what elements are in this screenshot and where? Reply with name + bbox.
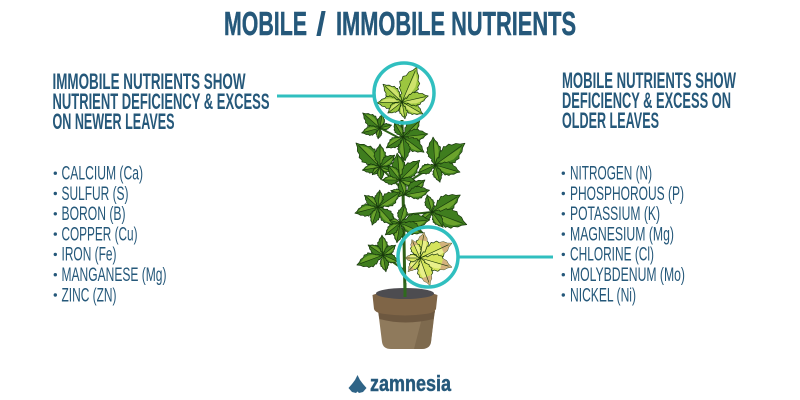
wordmark: zamnesia — [370, 371, 452, 396]
leaf: upper middle — [383, 115, 429, 161]
list: immobile nutrients: IRON (Fe) — [62, 244, 116, 266]
list: immobile nutrients: COPPER (Cu) — [62, 223, 138, 245]
leaf: old yellowing, bottom — [405, 231, 456, 288]
leaf: bottom left — [354, 235, 400, 273]
list: mobile nutrients: POTASSIUM (K) — [570, 203, 660, 225]
list: immobile nutrients: BORON (B) — [62, 203, 126, 225]
list: mobile nutrients: NICKEL (Ni) — [570, 284, 636, 306]
title: / — [316, 6, 326, 43]
list: immobile nutrients: MANGANESE (Mg) — [62, 264, 166, 286]
callout: newer leaves circle — [277, 63, 434, 123]
title: MOBILE — [224, 6, 307, 43]
leaf: lower centre — [382, 203, 431, 244]
heading: mobile nutrients — [562, 68, 736, 133]
list: immobile nutrients: SULFUR (S) — [62, 183, 128, 205]
title: IMMOBILE NUTRIENTS — [336, 6, 576, 43]
list: mobile nutrients — [562, 162, 685, 306]
leaf: mid left — [349, 136, 398, 180]
heading: immobile nutrients: NUTRIENT DEFICIENCY & EXCESS — [52, 89, 270, 114]
logo: zamnesia — [348, 371, 452, 396]
pot — [372, 283, 438, 349]
heading: immobile nutrients — [52, 69, 270, 134]
leaf: centre lower — [389, 175, 431, 202]
leaf: lower right — [418, 187, 470, 234]
leaf: centre — [382, 152, 425, 188]
list: mobile nutrients: NITROGEN (N) — [570, 162, 652, 184]
list: immobile nutrients: ZINC (ZN) — [62, 284, 116, 306]
heading: immobile nutrients: IMMOBILE NUTRIENTS SHOW — [52, 69, 246, 94]
leaf: small upper left — [359, 108, 392, 139]
list: mobile nutrients: MAGNESIUM (Mg) — [570, 223, 674, 245]
callout: older leaves circle — [398, 227, 553, 287]
list: immobile nutrients: CALCIUM (Ca) — [62, 162, 143, 184]
list: mobile nutrients: MOLYBDENUM (Mo) — [570, 264, 685, 286]
icon: logo mark — [348, 375, 366, 393]
list: mobile nutrients: CHLORINE (Cl) — [570, 244, 654, 266]
heading: mobile nutrients: OLDER LEAVES — [562, 108, 659, 133]
leaf: lower left — [353, 186, 404, 230]
heading: immobile nutrients: ON NEWER LEAVES — [52, 109, 174, 134]
leaf: mid right — [416, 135, 471, 184]
list: immobile nutrients — [54, 162, 166, 306]
leaf: new growth, top — [377, 63, 430, 120]
title — [224, 6, 576, 43]
list: mobile nutrients: PHOSPHOROUS (P) — [570, 183, 684, 205]
icon: cannabis plant in pot — [349, 63, 471, 349]
plant stems — [380, 120, 435, 296]
